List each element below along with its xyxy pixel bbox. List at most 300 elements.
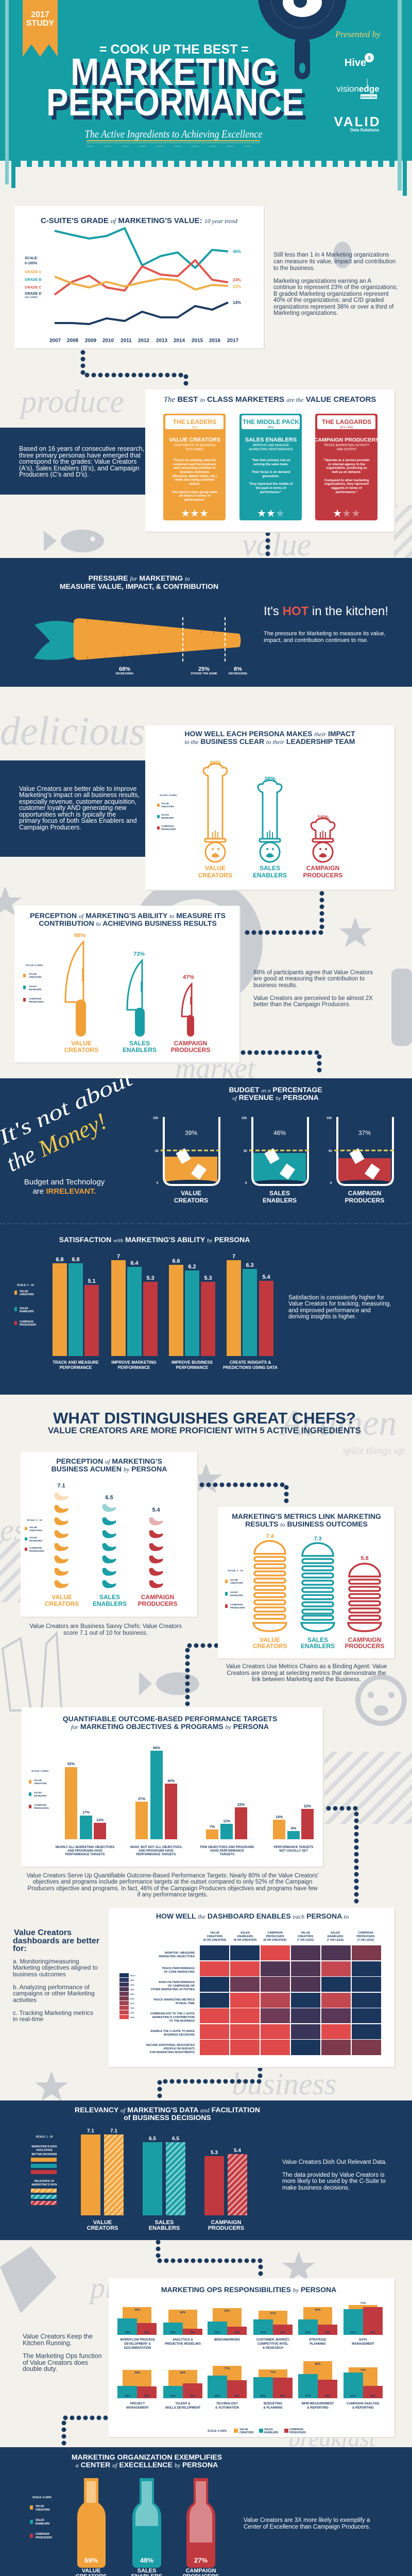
bar chart: satisfaction: 6.6 xyxy=(172,1258,180,1264)
glass: campaign producers 37%: 37% xyxy=(358,1129,371,1137)
icon: carrot chart: 68% xyxy=(119,666,130,672)
text block: grade findings: continue to represent 23% of the organizations; xyxy=(273,284,398,291)
decorative background stripes and script words: spice things up xyxy=(342,1445,404,1456)
text block: grade findings: Still less than 1 in 4 Marketing organizations xyxy=(273,252,389,258)
panel: c-suite grade line chart: 2011 xyxy=(121,338,132,344)
row 1 bars: 71% xyxy=(360,2302,366,2305)
chilis: value creators 7.1: VALUE xyxy=(52,1594,72,1601)
navy band: center of excellence and credibility: CREATORS xyxy=(36,2509,50,2512)
glass: sales enablers 46%: SALES xyxy=(269,1190,290,1197)
title: PERFORMANCE xyxy=(46,81,304,124)
card: the laggards: ★★★ xyxy=(333,507,360,519)
bar chart: satisfaction: TRACK AND MEASURE xyxy=(53,1360,99,1365)
card: the leaders: all others in terms of xyxy=(179,494,211,498)
panel: business acumen (chilis): VALUE xyxy=(29,1526,37,1529)
panel: dashboard heatmap: (8 OR GREATER) xyxy=(234,1939,256,1942)
row 2 bars: 61% xyxy=(350,2395,356,2398)
legend: ENABLERS xyxy=(161,817,174,819)
bar chart: satisfaction: PERFORMANCE xyxy=(118,1365,150,1370)
bar chart: relevancy: 6.5 xyxy=(172,2136,179,2142)
panel: metrics link (burgers) xyxy=(218,1507,396,1659)
heatmap legend: 15% xyxy=(130,2007,134,2009)
panel: dashboard heatmap: SECURE ADDITIONAL RESOURCES xyxy=(146,2044,195,2047)
row 2 bars: PROJECT xyxy=(130,2402,145,2405)
row 2 bars: & REPORTING xyxy=(352,2406,374,2410)
legend: SCALE: 0-100% xyxy=(26,964,43,967)
glass: sales enablers 46%: 46% xyxy=(273,1129,286,1137)
row 2 bars: 29% xyxy=(170,2395,176,2398)
chef hat: value creators: 46% xyxy=(210,760,221,766)
navy band: center of excellence and credibility: PRODUCERS xyxy=(36,2536,53,2539)
card: the leaders: centric. xyxy=(189,482,200,486)
knife: sales enablers 73%: 73% xyxy=(133,951,145,957)
panel: quantifiable performance targets bar chart: SCALE: 0-100% xyxy=(31,1770,49,1772)
panel: c-suite grade line chart: 2012 xyxy=(138,338,150,344)
text: kitchen running xyxy=(23,2333,102,2372)
card: the leaders: VALUE CREATORS xyxy=(169,437,220,443)
row 1 bars: 63% xyxy=(224,2310,230,2313)
panel: quantifiable performance targets bar chart: 27% xyxy=(138,1798,146,1801)
bar chart: satisfaction xyxy=(14,1253,278,1370)
chart legend: GRADE A xyxy=(25,270,41,274)
text: dashboards better for: c. Tracking Marketing metrics xyxy=(13,2009,93,2016)
heatmap legend: 10% xyxy=(130,2011,134,2014)
panel: business acumen (chilis): SCALE: 1 - 10 xyxy=(27,1519,42,1521)
bar chart: relevancy: VALUE xyxy=(93,2219,112,2226)
card: the leaders: and connecting activities to xyxy=(174,466,216,470)
row 2 bars: 35% xyxy=(190,2395,196,2398)
card: the leaders: "Focus on creating value for xyxy=(173,459,216,462)
chilis: sales enablers 6.5 xyxy=(93,1495,127,1607)
card: the laggards: CAMPAIGN PRODUCERS xyxy=(314,437,379,443)
heading: budget xyxy=(229,1086,322,1101)
legend: CREATORS xyxy=(29,976,42,978)
navy band: personas intro xyxy=(0,428,149,495)
icon: carrot chart: INCREASING xyxy=(116,672,133,675)
heading: it's not about the money: the Money! xyxy=(3,1108,111,1177)
navy band: value creators impact text: Marketing's impact on all business results, xyxy=(19,791,140,799)
card: the leaders: CONTRIBUTE TO BUSINESS xyxy=(174,444,216,447)
chef hat: campaign producers xyxy=(303,815,342,879)
glass: campaign producers 37%: 100 xyxy=(327,1117,332,1120)
row 1 bars: 66% xyxy=(315,2309,321,2312)
navy band: value creators impact text: especially revenue, customer acquisition, xyxy=(19,798,136,805)
card: the leaders: (Revenue, Market share, etc.) xyxy=(173,474,217,478)
text block: measuring contribution xyxy=(253,970,373,1008)
ops legend: SCALE: 0-100% xyxy=(208,2430,227,2433)
panel: dashboard heatmap: (8 OR GREATER) xyxy=(264,1939,286,1942)
panel: quantifiable performance targets bar chart: 12% xyxy=(96,1819,104,1822)
panel: best in class personas xyxy=(145,389,396,533)
card: the laggards: laggards in terms of xyxy=(331,486,363,490)
panel: c-suite grade line chart: 2008 xyxy=(67,338,79,344)
panel: business acumen (chilis): BUSINESS ACUMEN by PERSONA xyxy=(52,1465,167,1473)
chef hat: campaign producers: PRODUCERS xyxy=(303,872,342,879)
text: budget irrelevant xyxy=(24,1178,105,1196)
text block: grade findings: Marketing organizations earning an A xyxy=(273,278,371,284)
navy band: relevancy of data: RELEVANCY of MARKETING'S DATA and FACILITATION xyxy=(75,2106,260,2114)
card: the leaders: OUTCOMES xyxy=(186,448,203,451)
legend: SALES xyxy=(161,814,169,816)
card: the leaders: customers and the business xyxy=(173,463,216,466)
heatmap legend: 35% xyxy=(130,1988,134,1991)
navy band: center of excellence and credibility: ENABLERS xyxy=(36,2522,50,2526)
row 2 bars: & AUTOMATION xyxy=(215,2406,239,2410)
bar chart: satisfaction: IMPROVE BUSINESS xyxy=(171,1360,213,1365)
panel: metrics link (burgers): PRODUCERS xyxy=(230,1606,245,1609)
bar chart: satisfaction: SCALE: 1 - 10 xyxy=(17,1284,34,1287)
text: quantifiable targets finding: Value Creators Serve Up Quantifiable Outcome-Based Performance Targets: Nearly 80% of the Value Creators' xyxy=(27,1873,318,1879)
title xyxy=(46,42,307,128)
panel: dashboard heatmap: IN REAL-TIME xyxy=(176,2002,195,2005)
card: the laggards: organization, producing as xyxy=(326,466,367,470)
burger: sales enablers 7.3: SALES xyxy=(307,1636,328,1643)
chef hat: value creators: VALUE xyxy=(205,865,226,872)
panel: dashboard heatmap: ENABLE THE C-SUITE TO MAKE xyxy=(151,2030,195,2033)
chilis: value creators 7.1: CREATORS xyxy=(45,1600,79,1607)
bar chart: relevancy: CREATORS xyxy=(87,2225,118,2231)
glass: value creators 39%: 0 xyxy=(157,1182,159,1185)
decorative background stripes and script words: market xyxy=(175,1053,256,1084)
glass: value creators 39%: 50 xyxy=(155,1150,159,1153)
panel: c-suite grade line chart: 2014 xyxy=(174,338,185,344)
bar chart: satisfaction: 6.2 xyxy=(188,1264,196,1270)
heading: satisfaction: SATISFACTION with MARKETING'S ABILITY by PERSONA xyxy=(59,1235,250,1244)
panel: business acumen (chilis): PRODUCERS xyxy=(29,1550,44,1552)
row 2 bars: & PLANNING xyxy=(263,2406,283,2410)
card: the leaders: (A's) xyxy=(192,426,198,429)
text: dashboards better for: business outcomes xyxy=(13,1971,66,1978)
panel: dashboard heatmap: BUSINESS DECISIONS xyxy=(164,2033,195,2037)
text: business savvy chefs: Value Creators are Business Savvy Chefs: Value Creators xyxy=(29,1623,182,1630)
row 1 bars: 28% xyxy=(144,2331,150,2334)
ribbon: 2017 study xyxy=(23,0,58,57)
glass: sales enablers 46%: 0 xyxy=(245,1182,247,1185)
navy band: value creators impact text: Campaign Producers. xyxy=(19,824,81,831)
text: business savvy chefs: score 7.1 out of 10 for business. xyxy=(63,1630,148,1636)
chilis: value creators 7.1 xyxy=(45,1483,79,1607)
presenters logos: Hive xyxy=(345,57,366,69)
chart legend: GRADE B xyxy=(25,278,41,282)
text: satisfaction finding: and improved performance and xyxy=(288,1308,371,1314)
knife: sales enablers 73% xyxy=(123,951,157,1054)
panel: dashboard heatmap: VALUE xyxy=(210,1931,219,1935)
row 2 bars: CAMPAIGN ANALYSIS xyxy=(347,2402,380,2405)
text block: measuring contribution: are good at measuring their contribution to xyxy=(253,976,365,982)
text block: grade findings: organizations represent 38% or over a third of xyxy=(273,304,394,310)
ops legend: CAMPAIGN xyxy=(289,2428,303,2431)
panel: dashboard heatmap: (7 OR LESS) xyxy=(357,1939,374,1942)
ops legend: ENABLERS xyxy=(264,2431,279,2434)
text: metrics chains: Value Creators Use Metrics Chains as a Binding Agent: Value xyxy=(226,1664,387,1670)
row 1 bars: DOCUMENTATION xyxy=(124,2347,151,2350)
text block: measuring contribution: business results. xyxy=(253,982,298,989)
panel: quantifiable performance targets bar chart: 17% xyxy=(82,1811,90,1815)
title: MARKETING xyxy=(71,50,278,93)
icon: carrot chart: 25% xyxy=(198,666,210,672)
panel: quantifiable performance targets bar chart: ENABLERS xyxy=(34,1794,47,1797)
row 1 bars: 29% xyxy=(170,2331,176,2334)
text: relevant data: more likely to be used by the C-Suite to xyxy=(282,2178,386,2184)
panel: c-suite grade line chart: 40% xyxy=(233,249,241,254)
card: the middle pack: THE MIDDLE PACK xyxy=(243,418,299,426)
panel: quantifiable performance targets bar chart: NEARLY ALL MARKETING OBJECTIVES xyxy=(56,1846,114,1849)
navy band: center of excellence and credibility: MARKETING ORGANIZATION EXEMPLIFIES xyxy=(72,2453,222,2461)
panel: quantifiable performance targets bar chart: 52% xyxy=(67,1762,75,1766)
presenters logos: Presented by xyxy=(335,29,381,39)
card: the leaders: ★★★ xyxy=(181,507,209,519)
bar chart: relevancy: 7.1 xyxy=(110,2128,117,2134)
panel: dashboard heatmap: CAMPAIGN xyxy=(267,1931,283,1935)
panel: quantifiable performance targets bar chart: PERFORMANCE TARGETS xyxy=(274,1846,313,1849)
bar chart: satisfaction: IMPROVE MARKETING xyxy=(111,1360,157,1365)
card: the laggards: performance." xyxy=(336,490,357,494)
card: the middle pack: Their focus is on demand xyxy=(252,470,290,474)
legend: PRODUCERS xyxy=(161,828,176,831)
bar chart: relevancy: PRODUCERS xyxy=(208,2225,244,2231)
row 1 bars: PLANNING xyxy=(310,2343,326,2346)
navy band: value creators impact text: Value Creators are better able to improve xyxy=(19,785,136,792)
icon: frying pan with egg xyxy=(258,0,347,79)
panel: dashboard heatmap: CREATORS xyxy=(298,1935,314,1938)
heading: budget: BUDGET as a PERCENTAGE xyxy=(229,1086,322,1094)
text: relevant data: Value Creators Dish Out Relevant Data. xyxy=(282,2159,387,2165)
card: the middle pack: "See their primary role as xyxy=(251,459,290,462)
panel: dashboard heatmap: MONITOR / MEASURE xyxy=(165,1952,195,1955)
heading: what distinguishes great chefs: WHAT DISTINGUISHES GREAT CHEFS? xyxy=(53,1409,356,1427)
chart legend: SCALE: xyxy=(25,257,38,260)
glass: campaign producers 37%: 0 xyxy=(330,1182,332,1185)
navy band: money and satisfaction xyxy=(0,1066,412,1395)
text: budget irrelevant: are IRRELEVANT. xyxy=(32,1187,96,1196)
callout: hot in the kitchen: The pressure for Marketing to measure its value, xyxy=(264,631,386,637)
panel: c-suite grade line chart: 23% xyxy=(233,284,241,289)
bar chart: relevancy xyxy=(81,2128,247,2231)
ops legend xyxy=(208,2428,306,2434)
panel: dashboard heatmap: (7 OR LESS) xyxy=(327,1939,344,1942)
heading: what distinguishes great chefs: VALUE CREATORS ARE MORE PROFICIENT WITH 5 ACTIVE INGREDIENTS xyxy=(48,1426,361,1435)
burger: value creators 7.4: 7.4 xyxy=(266,1533,274,1539)
panel: metrics link (burgers): CAMPAIGN xyxy=(230,1603,243,1606)
row 1 bars: 24% xyxy=(324,2331,331,2334)
card: the laggards: or internal agency to the xyxy=(328,463,365,466)
bar chart: satisfaction: ENABLERS xyxy=(20,1310,34,1313)
bar chart: relevancy: 6.5 xyxy=(149,2136,156,2142)
panel: dashboard heatmap: HOW WELL the DASHBOARD ENABLES each PERSONA to xyxy=(156,1912,349,1920)
glass: value creators 39% xyxy=(153,1117,222,1204)
navy band: personas intro: Producers (C's and D's). xyxy=(19,471,89,478)
row 2 bars: 86% xyxy=(315,2363,321,2366)
text: relevant data: make business decisions. xyxy=(282,2185,350,2191)
panel: c-suite grade line chart: 24% xyxy=(233,278,241,282)
decorative background stripes and script words: business xyxy=(232,2067,336,2101)
row 2 bars: 74% xyxy=(360,2369,366,2372)
panel: dashboard heatmap: SALES xyxy=(331,1931,340,1935)
glass: sales enablers 46%: 50 xyxy=(244,1150,247,1153)
panel: perception of measuring contribution (knives) xyxy=(14,906,241,1063)
legend: FACILITATES xyxy=(36,2149,53,2152)
legend: CREATORS xyxy=(161,805,174,808)
legend: SCALE: 1 - 10 xyxy=(36,2136,53,2139)
panel: c-suite grade line chart: 2015 xyxy=(192,338,203,344)
row 2 bars: 69% xyxy=(180,2371,186,2375)
card: the laggards xyxy=(314,414,379,520)
burger: value creators 7.4: VALUE xyxy=(260,1636,280,1643)
panel: dashboard heatmap: PRODUCERS xyxy=(266,1935,284,1938)
bar chart: satisfaction: PREDICTIONS USING DATA xyxy=(223,1365,278,1370)
panel: business acumen (chilis): PERCEPTION of MARKETING'S xyxy=(56,1457,162,1465)
heatmap legend: 25% xyxy=(130,1997,134,2000)
row 2 bars: 49% xyxy=(280,2395,286,2398)
heatmap legend: 45% xyxy=(130,1979,134,1981)
row 2 bars: 43% xyxy=(234,2395,240,2398)
legend: VALUE xyxy=(161,802,169,805)
heatmap legend: 10% - xyxy=(130,2016,136,2019)
legend: ENABLERS xyxy=(29,988,42,991)
navy band: pressure to measure xyxy=(0,558,412,687)
row 1 bars: 36% xyxy=(305,2331,311,2334)
text: business savvy chefs xyxy=(29,1623,182,1636)
glass: value creators 39%: CREATORS xyxy=(174,1197,208,1204)
glass: campaign producers 37% xyxy=(327,1117,396,1204)
row 2 bars: TALENT & xyxy=(175,2402,191,2405)
navy band: value creators impact text xyxy=(0,760,149,857)
decorative background stripes and script words: delicious xyxy=(0,708,145,753)
panel: dashboard heatmap: COMMUNICATE TO THE C-SUITE xyxy=(150,2012,195,2015)
ops legend: CREATORS xyxy=(239,2431,254,2434)
callout: hot in the kitchen: It's HOT in the kitchen! xyxy=(264,604,388,618)
panel: quantifiable performance targets bar chart: NOT USUALLY SET xyxy=(279,1850,308,1853)
bar chart: satisfaction: VALUE xyxy=(20,1290,28,1293)
panel: metrics link (burgers): RESULTS to BUSINESS OUTCOMES xyxy=(245,1520,368,1528)
bottle: campaign producers 27%: 27% xyxy=(194,2556,208,2564)
icon: carrot chart: STAYED THE SAME xyxy=(191,672,217,675)
row 2 bars: BUDGETING xyxy=(264,2402,282,2405)
card: the laggards: THE LAGGARDS xyxy=(322,418,371,426)
text block: grade findings: B graded Marketing organizations represent xyxy=(273,291,389,297)
panel: dashboard heatmap: MARKETING OBJECTIVES xyxy=(159,1955,195,1958)
chart legend: GRADE C xyxy=(25,286,41,290)
panel: quantifiable performance targets bar chart: PERFORMANCE TARGETS xyxy=(65,1853,105,1856)
navy band: value creators impact text: opportunities which is typically the xyxy=(19,811,116,818)
logo: VALID: Data Solutions xyxy=(350,128,380,132)
navy band: center of excellence and credibility: SCALE: 0-100% xyxy=(32,2496,52,2499)
text: 3x more likely: Value Creators are 3X more likely to exemplify a xyxy=(244,2517,370,2523)
panel: c-suite grade line chart xyxy=(14,206,265,349)
text: dashboards better for: for: xyxy=(13,1944,27,1953)
text: satisfaction finding: Value Creators for tracking, measuring, xyxy=(288,1301,391,1307)
bar chart: satisfaction: 5.3 xyxy=(146,1275,154,1281)
bar chart: relevancy: 5.4 xyxy=(234,2148,241,2154)
presenters logos: MARKETING xyxy=(361,96,376,99)
glass: value creators 39%: 39% xyxy=(185,1129,197,1137)
row 2 bars: 54% xyxy=(214,2395,220,2398)
legend: SCALE: 0-100% xyxy=(160,794,177,796)
panel: dashboard heatmap: OF CORE MARKETING xyxy=(164,1971,195,1974)
glass: value creators 39%: 100 xyxy=(153,1117,159,1120)
text block: grade findings: to the business. xyxy=(273,265,315,272)
text: 3x more likely: Center of Excellence than Campaign Producers. xyxy=(244,2524,370,2530)
row 1 bars: MANAGEMENT xyxy=(352,2343,374,2346)
burger: sales enablers 7.3: ENABLERS xyxy=(301,1642,335,1650)
text: kitchen running: Value Creators Keep the xyxy=(23,2333,93,2340)
knife: value creators 88% xyxy=(64,933,98,1054)
card: the middle pack: SALES ENABLERS xyxy=(245,437,297,443)
decorative background stripes and script words: breakfast xyxy=(288,2425,376,2451)
panel: c-suite grade line chart: C-SUITE'S GRADE of MARKETING'S VALUE: 10 year trend xyxy=(41,216,238,225)
burger: campaign producers 5.8: PRODUCERS xyxy=(345,1642,384,1650)
legend: CAMPAIGN xyxy=(29,997,41,1000)
panel: quantifiable performance targets bar chart: AND PROGRAMS HAVE xyxy=(67,1850,102,1853)
row 2 bars: MPM MEASUREMENT xyxy=(302,2402,334,2405)
panel: quantifiable performance targets bar chart: for MARKETING OBJECTIVES & PROGRAMS by PERSONA xyxy=(71,1722,269,1731)
icon: carrot chart xyxy=(34,617,247,675)
row 1 bars: 19% xyxy=(234,2331,240,2334)
title: = COOK UP THE BEST = xyxy=(99,42,249,57)
glass: sales enablers 46%: 100 xyxy=(242,1117,247,1120)
panel: quantifiable performance targets bar chart: TARGETS xyxy=(220,1853,234,1856)
legend xyxy=(23,964,44,1003)
panel: c-suite grade line chart: 2017 xyxy=(227,338,239,344)
knife: sales enablers 73%: SALES xyxy=(129,1040,150,1047)
chilis: campaign producers 5.4: 5.4 xyxy=(152,1507,161,1513)
panel: dashboard heatmap xyxy=(109,1908,396,2068)
row 1 bars: 39% xyxy=(125,2331,131,2334)
card: the middle pack: the pack in terms of xyxy=(256,486,286,490)
legend: MARKETING'S DATA xyxy=(31,2183,57,2187)
knife: campaign producers 47%: PRODUCERS xyxy=(171,1046,210,1054)
chart legend xyxy=(25,257,41,298)
legend xyxy=(31,2136,57,2205)
heading: pressure xyxy=(60,574,218,590)
legend: VALUE xyxy=(29,973,37,975)
legend: BETTER DECISIONS xyxy=(32,2153,57,2156)
panel: quantifiable performance targets bar chart: 66% xyxy=(153,1747,161,1750)
panel: perception of measuring contribution (knives): PERCEPTION of MARKETING'S ABILIITY to MEASURE ITS xyxy=(30,911,226,920)
text: metrics chains: link between Marketing and the Business. xyxy=(252,1676,361,1683)
panel: dashboard heatmap: PRODUCERS xyxy=(356,1935,375,1938)
text block: grade findings: 40% of the organizations; and C/D graded xyxy=(273,297,384,303)
chilis: campaign producers 5.4 xyxy=(138,1507,177,1607)
text: dashboards better for: Marketing objectives aligned to xyxy=(13,1964,98,1971)
panel: c-suite grade line chart: 14% xyxy=(233,300,241,305)
row 1 bars: ANALYTICS & xyxy=(173,2338,194,2342)
chilis: sales enablers 6.5: 6.5 xyxy=(105,1495,113,1501)
legend: PRODUCERS xyxy=(29,1001,44,1003)
header banner xyxy=(0,0,412,196)
chilis: sales enablers 6.5: SALES xyxy=(99,1594,120,1601)
heading: it's not about the money xyxy=(0,1066,137,1177)
bottle: value creators 69%: 69% xyxy=(84,2556,98,2564)
panel: dashboard heatmap: ENABLERS xyxy=(328,1935,343,1938)
row 1 bars: COMPETITIVE INTEL xyxy=(258,2343,288,2346)
burger: campaign producers 5.8: CAMPAIGN xyxy=(348,1636,381,1643)
panel: metrics link (burgers): ENABLERS xyxy=(230,1594,243,1597)
navy band: center of excellence and credibility: VALUE xyxy=(36,2505,44,2508)
row 1 bars: 15% xyxy=(190,2331,196,2334)
card: the laggards: well as on demand. xyxy=(332,470,362,474)
knife: value creators 88%: VALUE xyxy=(71,1040,92,1047)
panel: quantifiable performance targets bar chart: PERFORMANCE TARGETS xyxy=(136,1853,176,1856)
panel: quantifiable performance targets bar chart xyxy=(22,1707,324,1868)
glass: campaign producers 37%: PRODUCERS xyxy=(345,1197,384,1204)
panel: metrics link (burgers): SCALE: 1 - 10 xyxy=(228,1569,243,1572)
bar chart: satisfaction: PERFORMANCE xyxy=(60,1365,92,1370)
bar chart: relevancy: SALES xyxy=(155,2219,174,2226)
text: dashboards better for xyxy=(13,1928,99,2023)
burger: campaign producers 5.8: 5.8 xyxy=(360,1555,369,1562)
panel: how well each persona makes impact clear (chef hats): to the BUSINESS CLEAR to their LEADERSHIP TEAM xyxy=(185,737,355,745)
